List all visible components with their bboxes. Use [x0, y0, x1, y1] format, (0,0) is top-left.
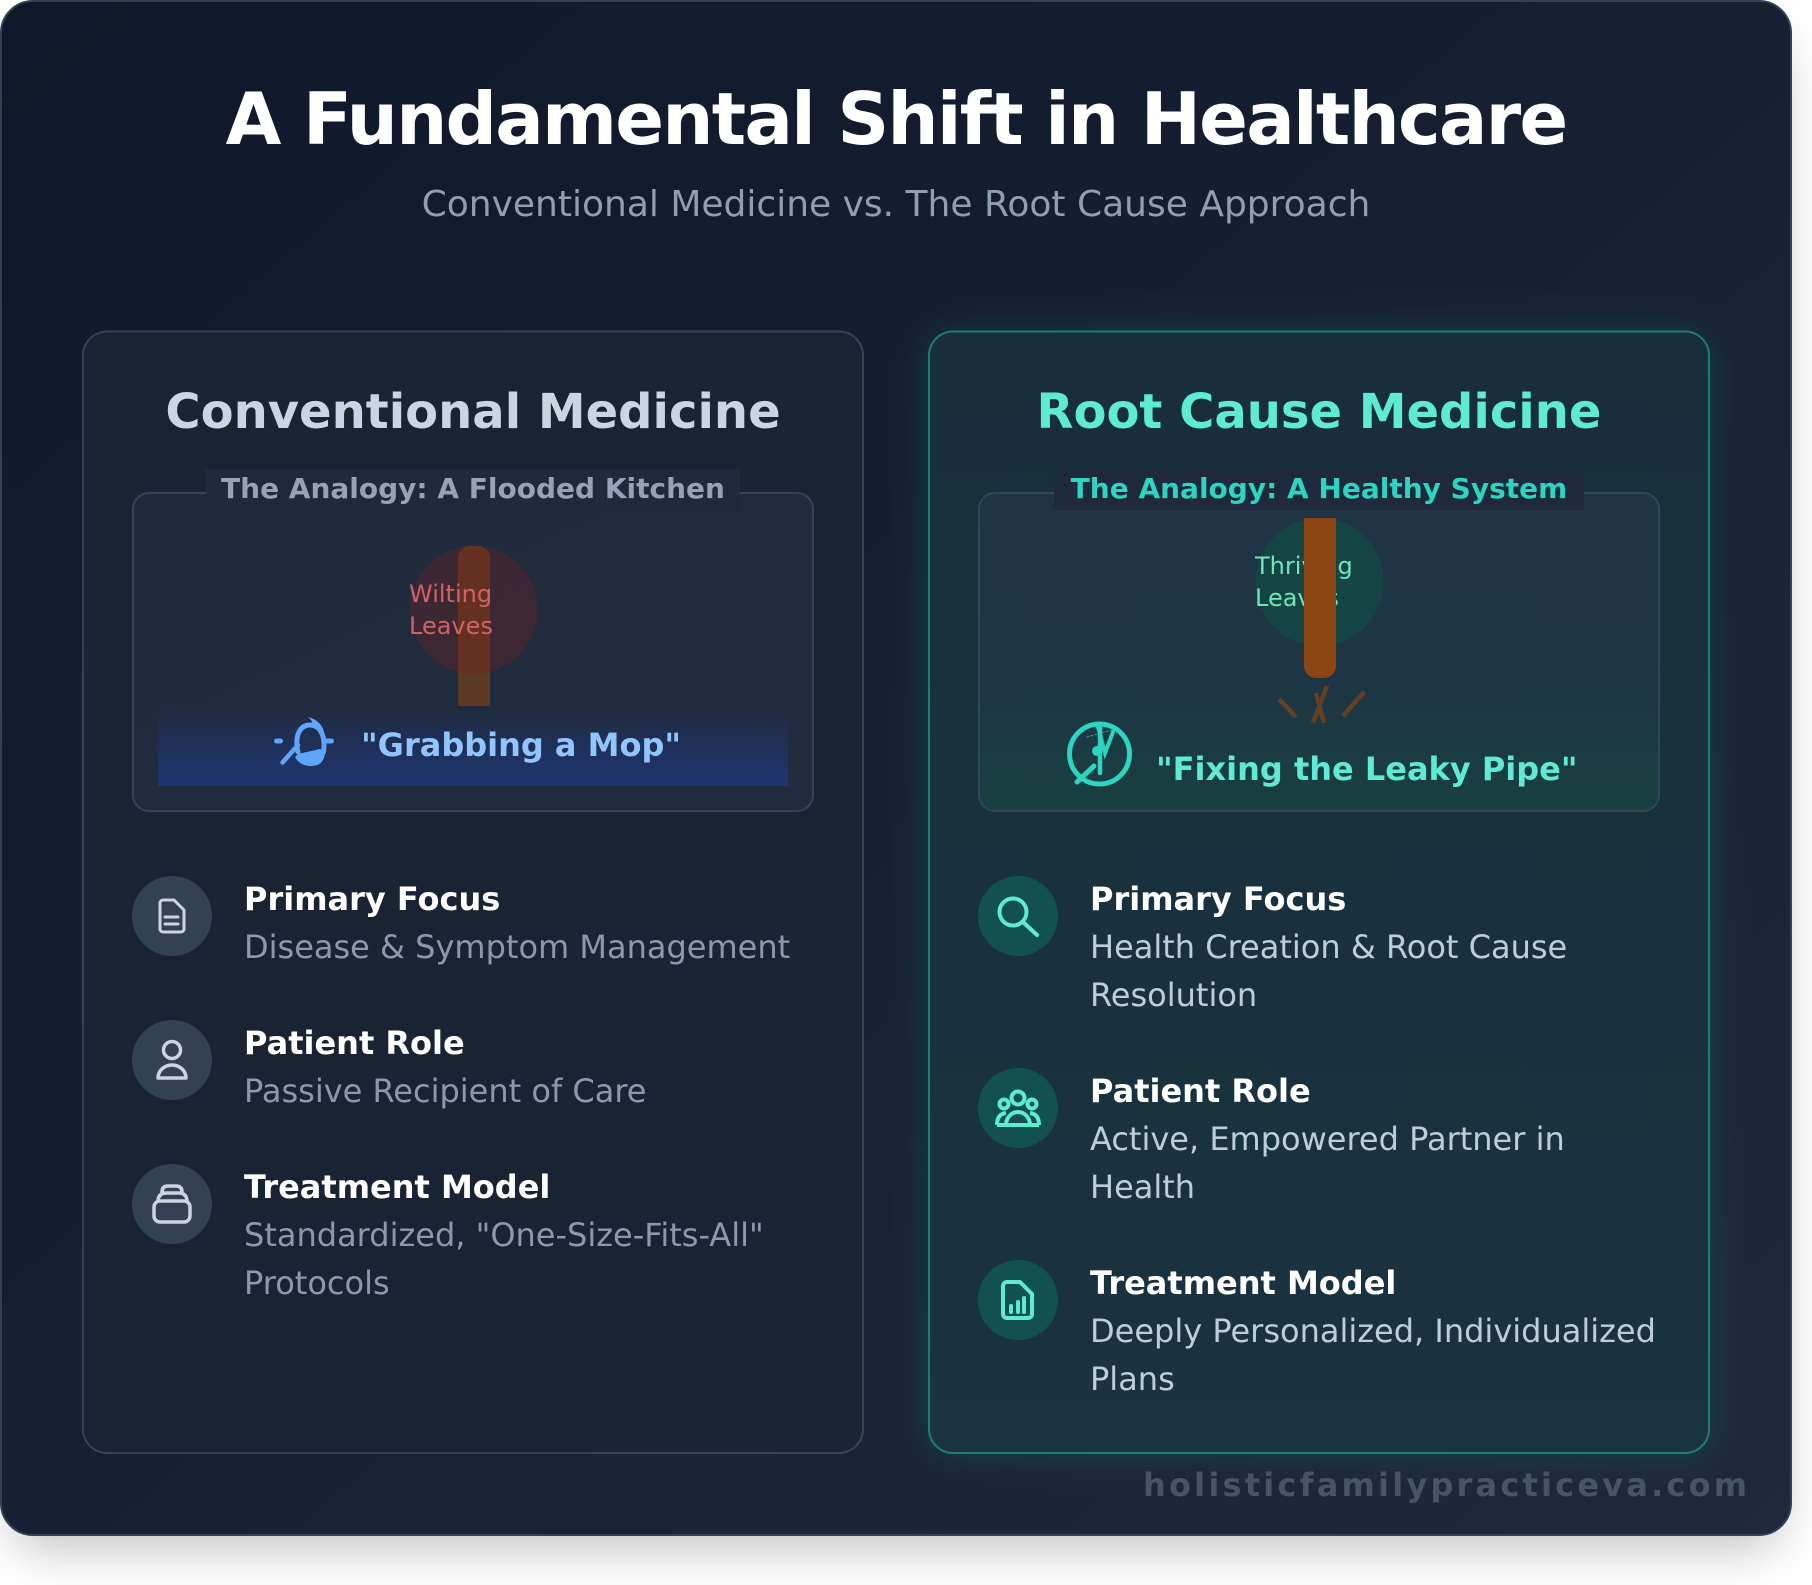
- item: patient role: Patient Role: [1090, 1072, 1311, 1110]
- icon: person: [132, 1020, 212, 1100]
- item: patient role: Passive Recipient of Care: [244, 1072, 646, 1110]
- watermark: holisticfamilypracticeva.com: [1143, 1466, 1750, 1504]
- item: treatment model: Deeply Personalized, Individualized: [1090, 1312, 1656, 1350]
- heading: conventional medicine: Conventional Medicine: [165, 384, 781, 440]
- icon: magnifier: [978, 876, 1058, 956]
- item: patient role: Patient Role: [244, 1024, 465, 1062]
- caption: grabbing a mop: "Grabbing a Mop": [361, 726, 681, 764]
- item: primary focus: [132, 876, 790, 966]
- icon: wrench in circle: [1070, 724, 1130, 784]
- item: treatment model: Treatment Model: [244, 1168, 550, 1206]
- item: treatment model: [978, 1260, 1656, 1398]
- item: patient role: [132, 1020, 646, 1110]
- analogy label: The Analogy: A Flooded Kitchen: [221, 472, 725, 505]
- item: treatment model: [132, 1164, 764, 1302]
- wilting tree: [409, 546, 538, 706]
- icon: group of people: [978, 1068, 1058, 1148]
- wilting tree: Leaves: [409, 612, 493, 640]
- flood water: [158, 710, 788, 786]
- item: patient role: Health: [1090, 1168, 1195, 1206]
- caption: fixing the leaky pipe: "Fixing the Leaky Pipe": [1156, 750, 1578, 788]
- item: primary focus: Disease & Symptom Management: [244, 928, 790, 966]
- thriving tree: Leaves: [1255, 584, 1339, 612]
- thriving tree: Thriving: [1254, 552, 1353, 580]
- item: primary focus: Resolution: [1090, 976, 1257, 1014]
- icon: document with chart: [978, 1260, 1058, 1340]
- item: treatment model: Treatment Model: [1090, 1264, 1396, 1302]
- wilting tree: Wilting: [409, 580, 492, 608]
- item: primary focus: Health Creation & Root Cause: [1090, 928, 1567, 966]
- roots: [1279, 686, 1364, 723]
- item: patient role: [978, 1068, 1565, 1206]
- item: treatment model: Plans: [1090, 1360, 1175, 1398]
- item: patient role: Active, Empowered Partner in: [1090, 1120, 1565, 1158]
- title: A Fundamental Shift in Healthcare: [226, 77, 1566, 161]
- subtitle: Conventional Medicine vs. The Root Cause Approach: [422, 184, 1370, 225]
- item: primary focus: [978, 876, 1567, 1014]
- panel: root cause medicine: [929, 332, 1709, 1453]
- analogy label: The Analogy: A Healthy System: [1071, 472, 1567, 505]
- item: primary focus: Primary Focus: [244, 880, 500, 918]
- thriving tree: [1254, 518, 1384, 723]
- icon: medicine box: [132, 1164, 212, 1244]
- icon: mop: [276, 717, 332, 766]
- panel: conventional medicine: [83, 332, 863, 1453]
- analogy box: flooded kitchen: [133, 469, 813, 811]
- item: treatment model: Protocols: [244, 1264, 390, 1302]
- icon: document: [132, 876, 212, 956]
- heading: root cause medicine: Root Cause Medicine: [1037, 384, 1601, 440]
- item: primary focus: Primary Focus: [1090, 880, 1346, 918]
- analogy box: healthy system: [979, 469, 1659, 811]
- item: treatment model: Standardized, "One-Size-Fits-All": [244, 1216, 764, 1254]
